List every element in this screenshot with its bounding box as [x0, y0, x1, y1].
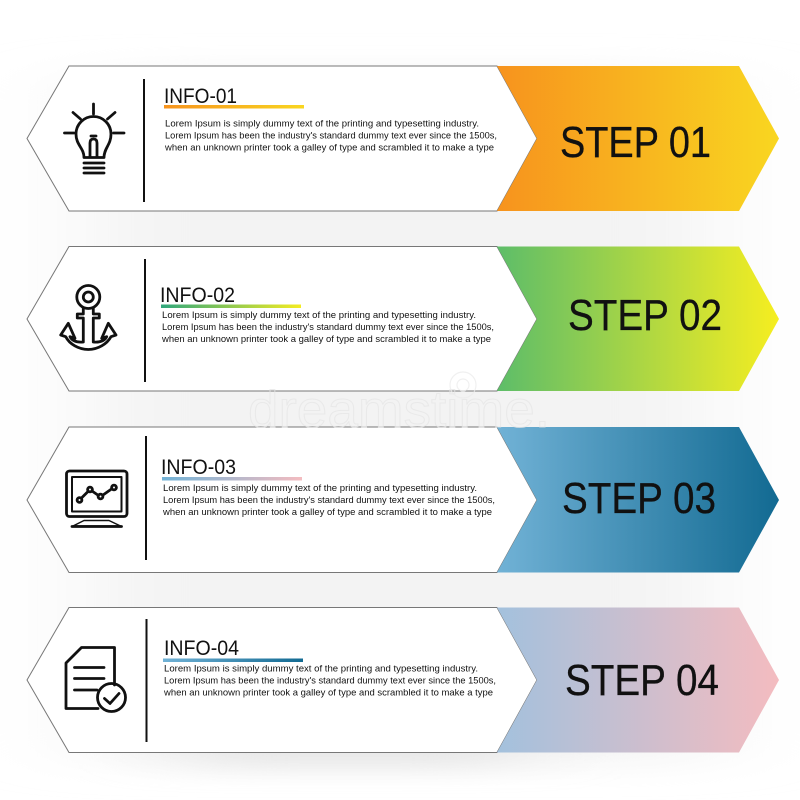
panel: step 03 — [27, 427, 779, 572]
text block 03: Lorem Ipsum has been the industry's standard dummy text ever since the 1500s, — [163, 495, 495, 505]
white info panel 04 — [27, 608, 537, 752]
heading: INFO-03: INFO-03 — [161, 456, 236, 479]
arrow: step 02 — [497, 246, 779, 391]
icon: document with check — [66, 648, 126, 712]
text block 04: when an unknown printer took a galley of type and scrambled it to make a type — [163, 688, 493, 698]
text block 01 — [164, 118, 497, 152]
label: STEP 01: STEP 01 — [560, 118, 711, 167]
text block 02: when an unknown printer took a galley of type and scrambled it to make a type — [161, 334, 491, 344]
text block 03 — [162, 483, 495, 517]
divider — [146, 619, 148, 742]
text block 04: Lorem Ipsum is simply dummy text of the printing and typesetting industry. — [164, 664, 478, 674]
background soft shadow — [90, 72, 710, 765]
underline 01 — [164, 105, 304, 108]
label: STEP 02: STEP 02 — [568, 291, 722, 340]
divider — [143, 79, 145, 202]
text block 04: Lorem Ipsum has been the industry's standard dummy text ever since the 1500s, — [164, 676, 496, 686]
text block 04 — [163, 664, 496, 698]
icon: monitor with line chart — [66, 471, 127, 526]
text block 02: Lorem Ipsum is simply dummy text of the printing and typesetting industry. — [162, 310, 476, 320]
underline 04 — [163, 658, 303, 662]
white info panel 01 — [27, 66, 537, 211]
white info panel 03 — [27, 427, 537, 572]
divider — [145, 436, 147, 560]
text block 01: Lorem Ipsum is simply dummy text of the printing and typesetting industry. — [165, 118, 479, 128]
text block 02 — [161, 310, 494, 344]
underline 02 — [161, 304, 301, 308]
icon: anchor — [61, 286, 116, 350]
heading: INFO-04: INFO-04 — [164, 637, 239, 660]
underline 03 — [162, 477, 302, 480]
arrow: step 04 — [497, 608, 779, 752]
label: STEP 03: STEP 03 — [562, 474, 716, 523]
text block 03: when an unknown printer took a galley of type and scrambled it to make a type — [162, 507, 492, 517]
panel: step 02 — [27, 246, 779, 391]
text block 01: when an unknown printer took a galley of type and scrambled it to make a type — [164, 142, 494, 152]
divider — [144, 259, 146, 382]
heading: INFO-02: INFO-02 — [160, 284, 235, 307]
text block 01: Lorem Ipsum has been the industry's standard dummy text ever since the 1500s, — [165, 130, 497, 140]
label: STEP 04: STEP 04 — [565, 656, 719, 705]
watermark: dreamstime. — [248, 381, 550, 439]
arrow: step 03 — [497, 427, 779, 572]
heading: INFO-01: INFO-01 — [164, 85, 237, 108]
white info panel 02 — [27, 246, 537, 391]
panel: step 01 — [27, 66, 779, 211]
panel: step 04 — [27, 608, 779, 752]
arrow: step 01 — [497, 66, 779, 211]
icon: light bulb — [64, 104, 124, 173]
text block 03: Lorem Ipsum is simply dummy text of the printing and typesetting industry. — [163, 483, 477, 493]
text block 02: Lorem Ipsum has been the industry's standard dummy text ever since the 1500s, — [162, 322, 494, 332]
